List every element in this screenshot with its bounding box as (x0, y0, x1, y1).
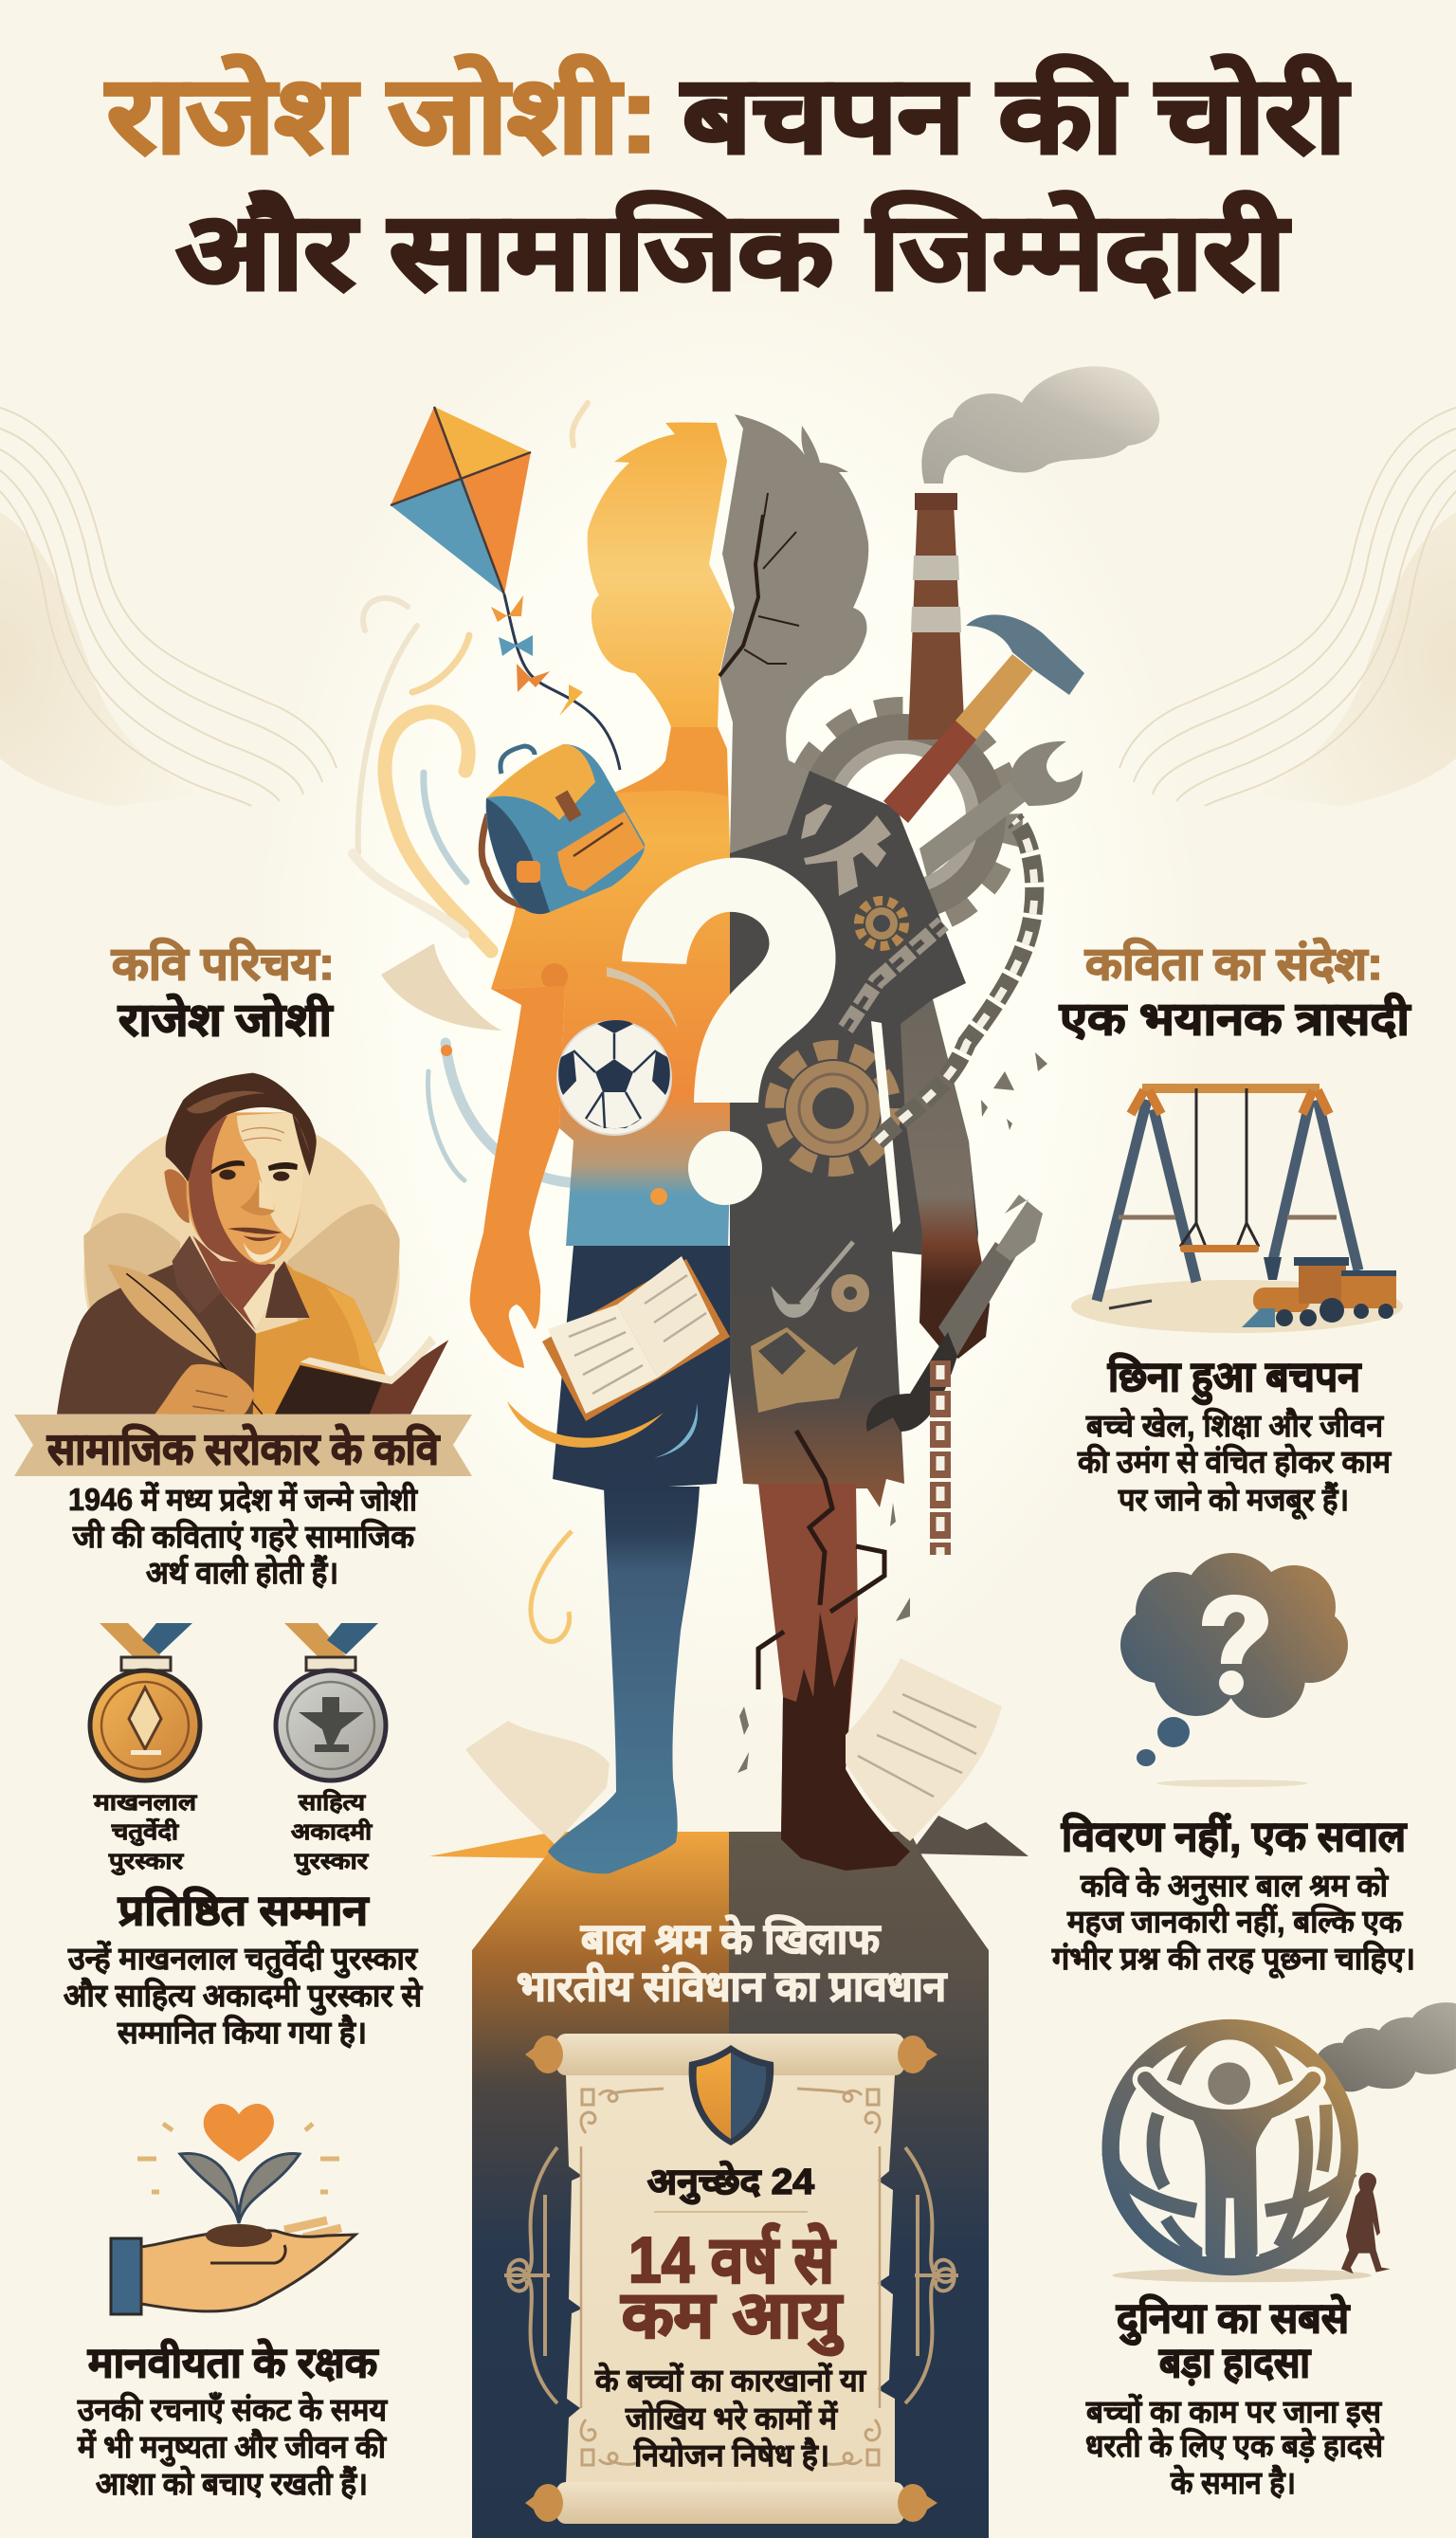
heading: message: एक भयानक त्रासदी (1059, 993, 1411, 1045)
icon: small bronze gear (859, 901, 904, 946)
panel: poem message (1051, 938, 1456, 2500)
icon: held wrench (866, 1195, 1043, 1432)
text: award names (93, 1789, 373, 1875)
icon: football (557, 1020, 671, 1135)
pedestal heading: बाल श्रम के खिलाफ (580, 1914, 882, 1963)
right half head (719, 414, 868, 853)
background waves: right (1119, 408, 1456, 806)
text: award names: चतुर्वेदी (111, 1818, 179, 1846)
left half torso (491, 727, 730, 1246)
heading: message: कविता का संदेश: (1084, 938, 1383, 990)
question mark dot (688, 1131, 762, 1205)
title: बचपन की चोरी (681, 54, 1351, 174)
text: stolen childhood (1077, 1407, 1392, 1520)
pedestal heading: भारतीय संविधान का प्रावधान (517, 1962, 948, 2010)
text: humanity (77, 2391, 389, 2501)
leg cracks (758, 1431, 884, 1689)
text: a question: गंभीर प्रश्न की तरह पूछना चाहिए। (1051, 1940, 1415, 1979)
heading: poet intro (111, 938, 335, 1046)
icon: swing and toy train (1071, 1088, 1403, 1333)
icon: big grey gear (796, 711, 1009, 923)
swirl near leg (531, 1531, 572, 1641)
icon: question mark (622, 858, 836, 1103)
text: biggest tragedy: के समान है। (1170, 2464, 1296, 2500)
heading: message (1059, 938, 1411, 1045)
text: biggest tragedy: बच्चों का काम पर जाना इस (1085, 2393, 1383, 2429)
text: a question (1051, 1867, 1415, 1979)
text: poet bio: अर्थ वाली होती हैं। (146, 1554, 338, 1590)
text: a question: कवि के अनुसार बाल श्रम को (1080, 1867, 1389, 1906)
icon: gold medal (90, 1623, 200, 1780)
icon: hanging chain (930, 1360, 951, 1555)
text: stolen childhood: की उमंग से वंचित होकर काम (1077, 1443, 1392, 1479)
text: biggest tragedy: धरती के लिए एक बड़े हादसे (1085, 2427, 1385, 2463)
paper left (465, 1721, 610, 1844)
icon: thought cloud (1120, 1553, 1348, 1787)
left arm (470, 986, 565, 1368)
text: humanity: आशा को बचाए रखती हैं। (96, 2465, 368, 2501)
heading: a question: विवरण नहीं, एक सवाल (1061, 1812, 1408, 1860)
text: poet bio (68, 1481, 418, 1590)
icon: large bronze gear (774, 1050, 892, 1167)
age headline: 14 वर्ष से (628, 2223, 836, 2296)
leg right dark lower (781, 1612, 910, 1871)
text: award names: साहित्य (298, 1789, 366, 1816)
article body: जोखिय भरे कामों में (625, 2400, 838, 2436)
panel: poet intro (14, 938, 472, 1590)
text: award names: माखनलाल (93, 1790, 198, 1816)
book (370, 1340, 448, 1415)
shorts right (730, 1251, 904, 1507)
text: biggest tragedy (1085, 2393, 1385, 2500)
smoke (921, 366, 1159, 484)
text: stolen childhood: बच्चे खेल, शिक्षा और जीवन (1085, 1407, 1385, 1443)
icon: long chain (877, 820, 1034, 1141)
text: honours: और साहित्य अकादमी पुरस्कार से (64, 1977, 424, 2016)
text: humanity: में भी मनुष्यता और जीवन की (77, 2428, 387, 2467)
scroll (525, 2034, 937, 2524)
article body: के बच्चों का कारखानों या (594, 2362, 866, 2398)
icon: hand with sprout and heart (111, 2104, 355, 2314)
hand (155, 1364, 254, 1415)
text: humanity: उनकी रचनाएँ संकट के समय (77, 2391, 389, 2427)
banner: सामाजिक सरोकार के कवि (46, 1424, 440, 1473)
right arm (901, 999, 990, 1359)
icon: globe with child and smoke (1109, 2002, 1456, 2282)
torso symbols (801, 804, 891, 896)
age headline: कम आयु (620, 2279, 844, 2356)
panel: humanity (77, 2104, 389, 2501)
icon: silver medal (276, 1623, 386, 1780)
text: honours (64, 1940, 424, 2050)
text: award names: अकादमी (291, 1818, 373, 1845)
background waves: left (0, 408, 337, 806)
age headline (620, 2223, 844, 2356)
text: poet bio: 1946 में मध्य प्रदेश में जन्मे जोशी (68, 1481, 418, 1517)
decorative swirls left (353, 403, 654, 1183)
child silhouette (1341, 2173, 1391, 2273)
paper right (846, 1658, 1002, 1841)
portrait (57, 1073, 448, 1432)
icon: hammer (883, 614, 1084, 823)
icon: kite (391, 407, 620, 770)
heading: poet intro: राजेश जोशी (118, 994, 334, 1046)
icon: chain across torso (846, 923, 943, 1029)
paper scrap flying left (381, 943, 502, 1031)
central figure: child split in two (353, 366, 1159, 1873)
title: और सामाजिक जिम्मेदारी (176, 191, 1291, 311)
heading: honours: प्रतिष्ठित सम्मान (118, 1886, 370, 1934)
pedestal heading (517, 1914, 948, 2010)
right torso (730, 771, 978, 1261)
article body (594, 2362, 866, 2473)
icon: wrench in torso (919, 741, 1083, 877)
icon: backpack (482, 744, 645, 914)
leg right (758, 1484, 910, 1871)
text: award names: पुरस्कार (108, 1849, 184, 1875)
article body: नियोजन निषेध है। (633, 2437, 829, 2473)
swoosh under book (507, 1401, 664, 1448)
white tear through gear (871, 1021, 901, 1232)
debris (737, 1052, 1047, 1773)
feather (107, 1264, 221, 1363)
title (105, 54, 1351, 311)
text: poet bio: जी की कविताएं गहरे सामाजिक (72, 1518, 416, 1554)
left half head (588, 423, 733, 727)
article text: अनुच्छेद 24 (647, 2161, 814, 2204)
text: honours: उन्हें माखनलाल चतुर्वेदी पुरस्कार (67, 1940, 418, 1979)
icon: open book (542, 1256, 730, 1421)
text: stolen childhood: पर जाने को मजबूर हैं। (1118, 1481, 1349, 1520)
head crack (719, 493, 799, 676)
pedestal (429, 1816, 1028, 2538)
text: a question: महज जानकारी नहीं, बल्कि एक (1066, 1903, 1404, 1939)
icon: chimney (908, 493, 965, 739)
text: award names: पुरस्कार (294, 1849, 369, 1875)
heading: stolen childhood: छिना हुआ बचपन (1107, 1352, 1362, 1405)
text: honours: सम्मानित किया गया है। (117, 2014, 367, 2050)
shorts tools (751, 1242, 869, 1413)
ornaments beside scroll (504, 2147, 958, 2403)
title: राजेश जोशी: (105, 54, 659, 174)
heading: poet intro: कवि परिचय: (111, 938, 335, 990)
heading: biggest tragedy: बड़ा हादसा (1158, 2340, 1311, 2386)
heading: biggest tragedy (1116, 2293, 1351, 2386)
leg left (548, 1487, 700, 1873)
panel: awards (64, 1623, 424, 2050)
shorts left (553, 1246, 730, 1490)
icon: shield (689, 2045, 774, 2145)
heading: biggest tragedy: दुनिया का सबसे (1116, 2293, 1351, 2346)
heading: humanity: मानवीयता के रक्षक (87, 2338, 379, 2386)
